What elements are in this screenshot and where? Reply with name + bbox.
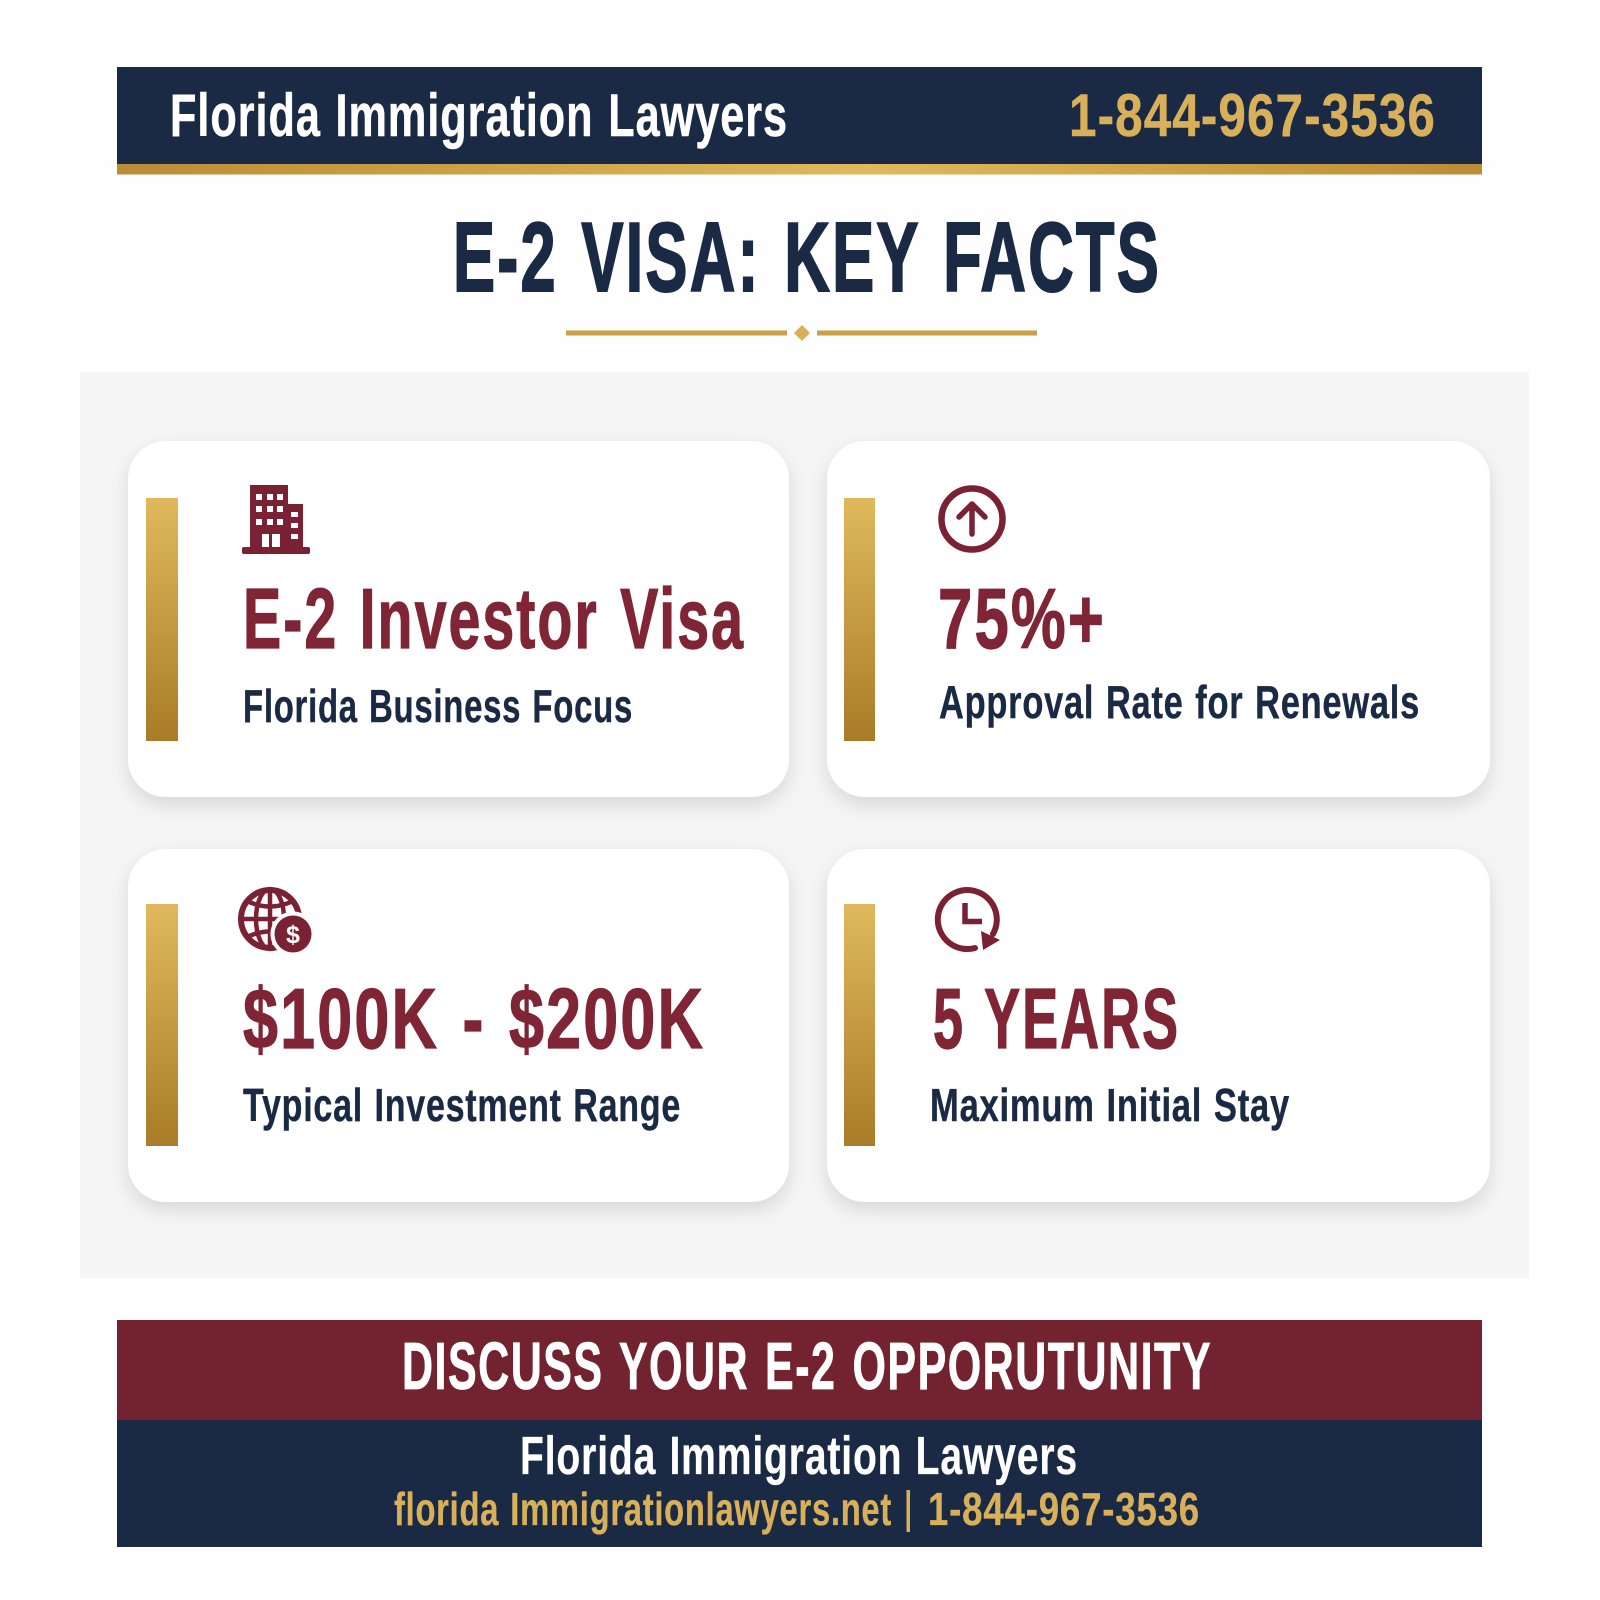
- icon: up arrow in circle: [942, 488, 1002, 550]
- caption: Florida Business Focus: [243, 680, 633, 732]
- website: florida Immigrationlawyers.net: [394, 1483, 892, 1535]
- icon: office building: [242, 485, 310, 554]
- value: 5 YEARS: [933, 972, 1180, 1067]
- card: investment range: [128, 849, 789, 1202]
- separator: [906, 1490, 910, 1532]
- caption: Approval Rate for Renewals: [939, 676, 1420, 728]
- card: E-2 investor visa: [128, 441, 789, 797]
- panel: key facts: [80, 372, 1529, 1278]
- gold accent bar: [844, 904, 875, 1146]
- firm name: Florida Immigration Lawyers: [170, 82, 788, 149]
- caption: Maximum Initial Stay: [930, 1079, 1290, 1131]
- footer firm name: Florida Immigration Lawyers: [520, 1426, 1078, 1486]
- phone number: 1-844-967-3536: [1069, 82, 1436, 149]
- value: $100K - $200K: [243, 972, 705, 1067]
- call to action band: [117, 1320, 1482, 1421]
- title divider: [566, 325, 1037, 341]
- icon: globe with dollar coin: $: [286, 921, 300, 949]
- header bar: [117, 67, 1482, 174]
- value: 75%+: [938, 572, 1106, 667]
- card: initial stay: [827, 849, 1490, 1202]
- main title: E-2 VISA: KEY FACTS: [453, 202, 1161, 312]
- footer phone: 1-844-967-3536: [928, 1483, 1200, 1535]
- gold accent bar: [844, 498, 875, 741]
- caption: Typical Investment Range: [243, 1079, 681, 1131]
- card: approval rate: [827, 441, 1490, 797]
- gold accent bar: [146, 904, 178, 1146]
- gold accent bar: [146, 498, 178, 741]
- footer contact band: [117, 1420, 1482, 1547]
- icon: globe with dollar coin: [241, 889, 316, 956]
- icon: clock with arrow: [938, 890, 1000, 950]
- value: E-2 Investor Visa: [243, 572, 745, 667]
